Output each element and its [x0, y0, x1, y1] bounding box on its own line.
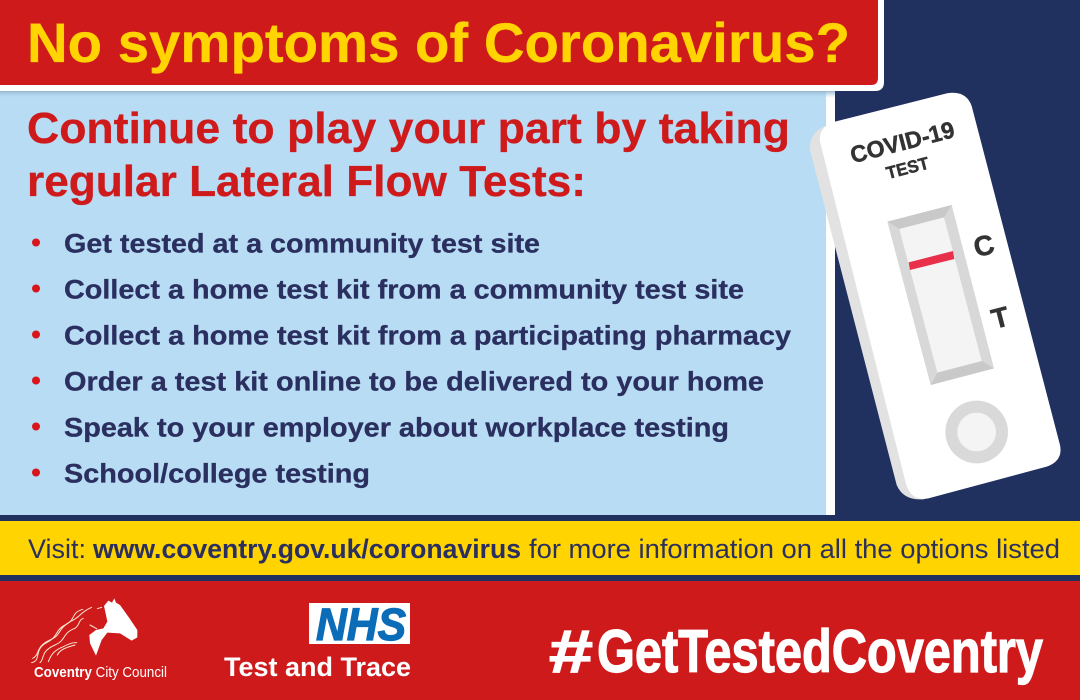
logo: NHS Test and Trace: Test and Trace — [224, 652, 411, 682]
subheading: Continue to play your part by taking — [27, 105, 790, 153]
bullet markers — [32, 238, 40, 476]
bullet list: Get tested at a community test site — [64, 228, 540, 258]
footer band — [0, 581, 1080, 700]
control and test labels: C — [970, 228, 998, 263]
logo: NHS Test and Trace: NHS — [316, 599, 406, 650]
council name: Coventry City Council — [34, 664, 167, 681]
bullet list: Collect a home test kit from a participating pharmacy — [64, 320, 791, 350]
bullet list: Collect a home test kit from a community test site — [64, 274, 744, 304]
bullet list: School/college testing — [64, 458, 370, 488]
icon: flowing hair — [32, 607, 102, 663]
logo: NHS Test and Trace — [224, 599, 411, 682]
test name: COVID-19 — [847, 116, 957, 168]
illustration: lateral flow test cassette — [810, 93, 1061, 499]
sample well — [945, 401, 1008, 463]
test name: TEST — [884, 153, 931, 183]
panel: test options — [0, 90, 835, 515]
title: No symptoms of Coronavirus? — [27, 11, 850, 74]
subheading: regular Lateral Flow Tests: — [27, 158, 586, 206]
information strip: for more information on all the options listed — [529, 534, 1060, 564]
control and test labels — [970, 228, 1012, 335]
information strip: www.coventry.gov.uk/coronavirus — [92, 534, 521, 564]
subheading — [27, 105, 790, 206]
control and test labels: T — [988, 301, 1012, 335]
logo: Coventry City Council — [32, 598, 167, 681]
icon: horse head — [89, 598, 137, 656]
result window — [887, 205, 994, 385]
bullet list: Speak to your employer about workplace testing — [64, 412, 729, 442]
hashtag: # — [549, 618, 593, 685]
title banner — [0, 0, 884, 91]
information strip — [0, 521, 1080, 575]
bullet list — [64, 228, 791, 488]
information strip: Visit: — [28, 534, 86, 564]
bullet list: Order a test kit online to be delivered to your home — [64, 366, 764, 396]
